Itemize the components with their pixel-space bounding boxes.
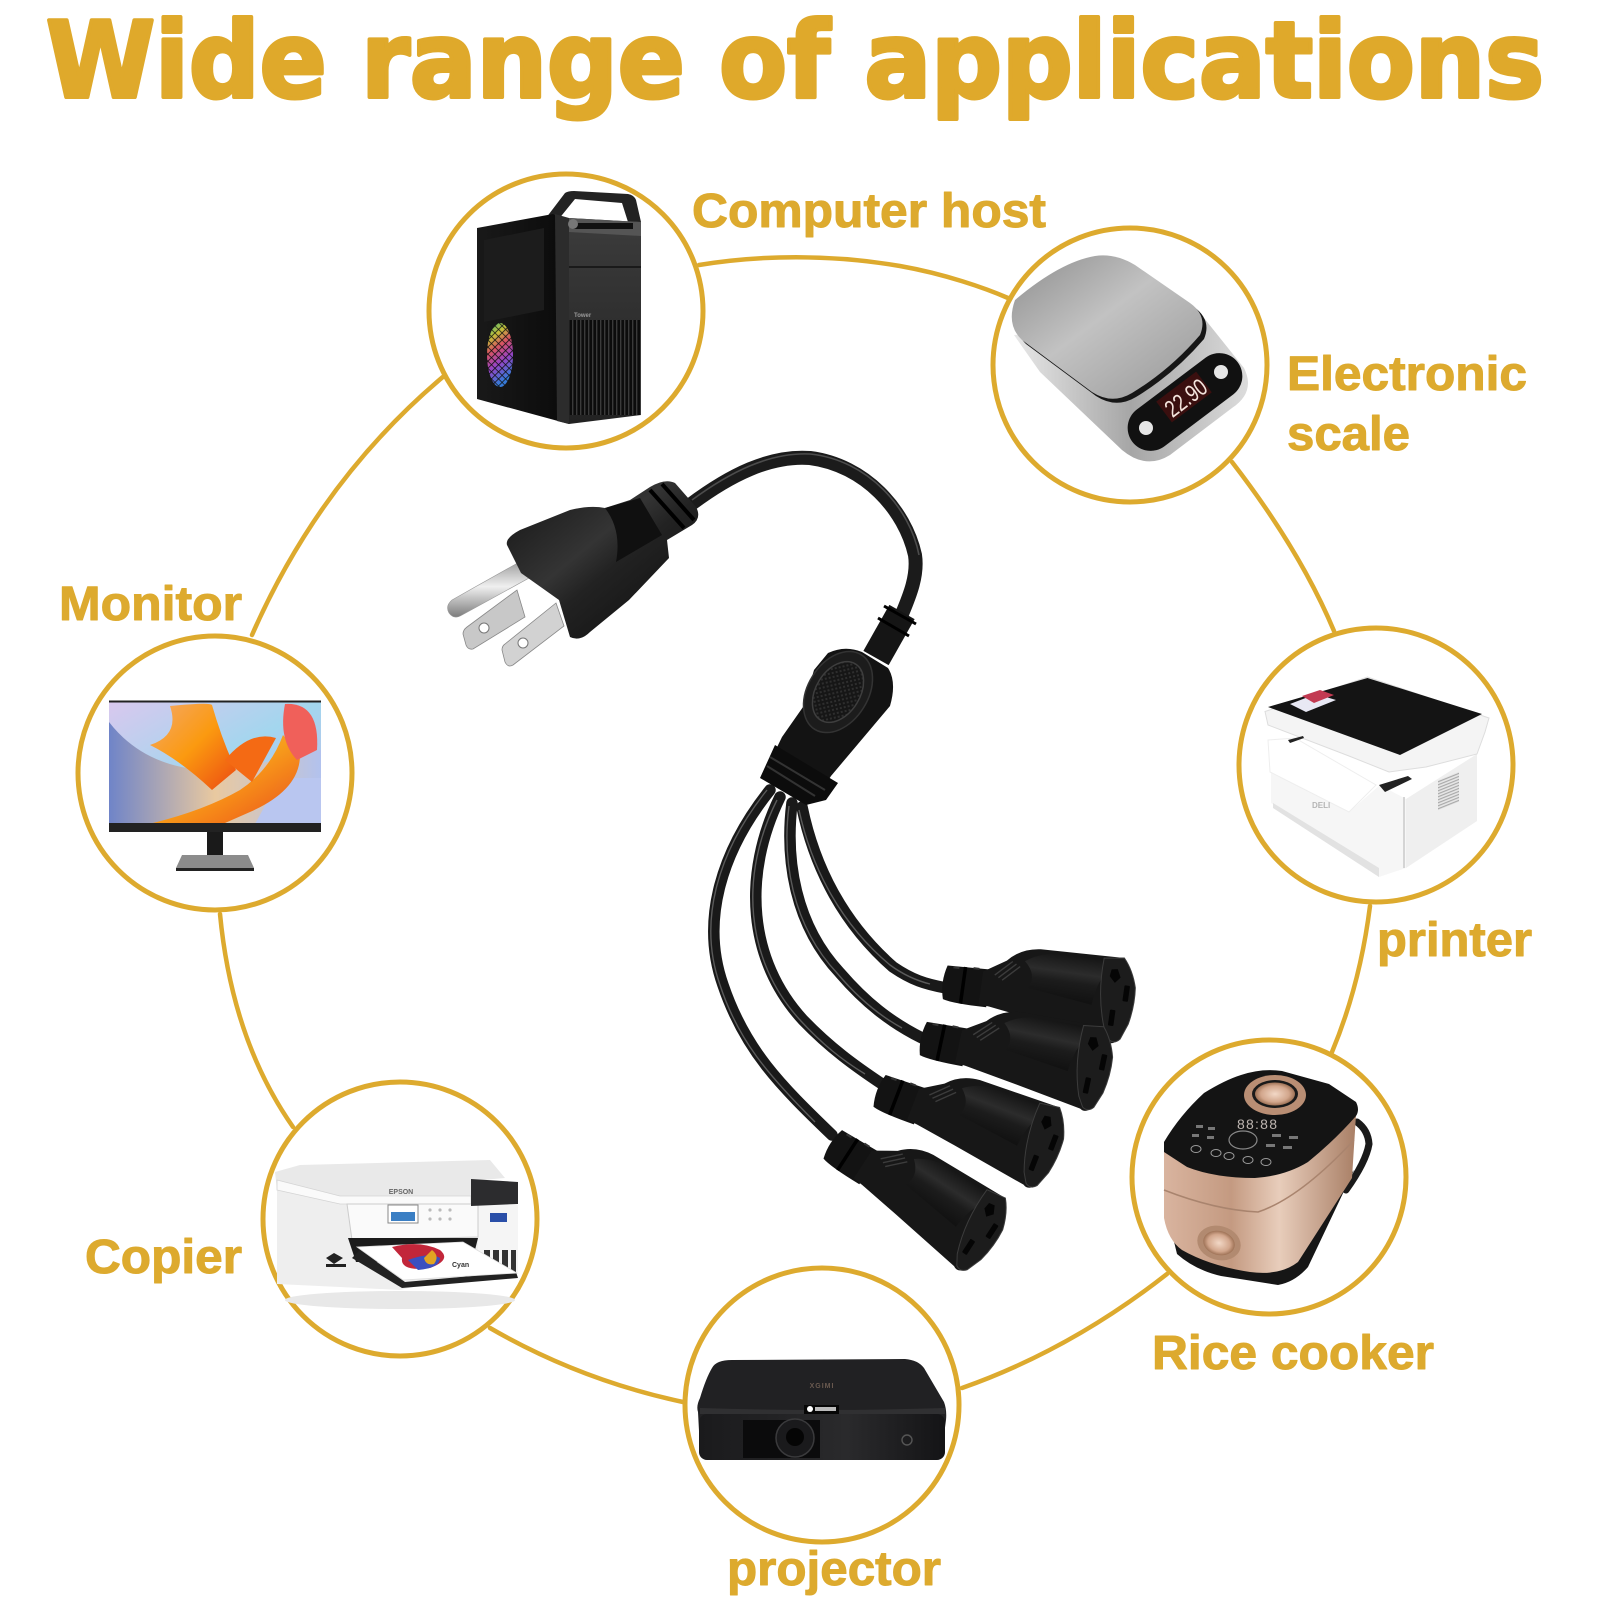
panel: monitor [59, 578, 352, 910]
outlet 1 [938, 933, 1140, 1046]
junction hub [760, 606, 916, 805]
connector ring [220, 257, 1370, 1402]
icon: monitor [109, 700, 321, 871]
panel: copier [85, 1082, 537, 1356]
icon: inkjet copier: EPSON [389, 1189, 413, 1196]
plug body [507, 481, 698, 639]
power cable [448, 454, 1140, 1279]
outlet 4 [810, 1102, 1019, 1279]
icon: laser printer [1265, 677, 1489, 877]
icon: inkjet copier: Cyan [452, 1262, 469, 1269]
label: rice cooker: Rice cooker [1152, 1327, 1434, 1380]
panel: printer [1239, 628, 1532, 967]
plug [448, 481, 698, 666]
icon: blade 1 [463, 590, 525, 649]
icon: laser printer: DELI [1312, 801, 1330, 810]
icon: computer tower [477, 191, 641, 424]
icon: projector box [697, 1359, 946, 1460]
icon: ground pin [448, 556, 540, 617]
panel: computer host [429, 174, 1046, 448]
outlet 2 [913, 990, 1119, 1114]
icon: rice cooker [1164, 1070, 1369, 1285]
icon: computer tower: Tower [574, 313, 592, 319]
icon: rice cooker: 88:88 [1237, 1116, 1277, 1132]
circle: monitor [78, 636, 352, 910]
outlet 3 [864, 1044, 1074, 1194]
cable: lead highlights [711, 790, 930, 1122]
icon: kitchen scale: 22.90 [1160, 374, 1213, 423]
circle: computer host [429, 174, 703, 448]
circle: printer [1239, 628, 1513, 902]
label: monitor: Monitor [59, 578, 242, 631]
circle: copier [263, 1082, 537, 1356]
cable: main cord [690, 458, 916, 614]
label: printer: printer [1377, 914, 1532, 967]
label: copier: Copier [85, 1231, 242, 1284]
icon: projector box: XGIMI [810, 1383, 834, 1390]
cable: four branch leads [714, 790, 946, 1135]
label: computer host: Computer host [692, 185, 1046, 238]
icon: blade 2 [502, 603, 564, 666]
panel: rice cooker [1132, 1040, 1434, 1380]
label: electronic scale: Electronic [1287, 348, 1527, 401]
title: Wide range of applications [46, 0, 1544, 122]
cable: main cord highlight [692, 454, 919, 555]
panel: electronic scale [993, 228, 1527, 502]
icon: kitchen scale [1012, 255, 1252, 461]
circle: rice cooker [1132, 1040, 1406, 1314]
icon: inkjet copier [275, 1160, 518, 1309]
circle: electronic scale [993, 228, 1267, 502]
label: projector: projector [727, 1543, 941, 1596]
circle: projector [685, 1268, 959, 1542]
panel: projector [685, 1268, 959, 1596]
label: scale: scale [1287, 408, 1410, 461]
